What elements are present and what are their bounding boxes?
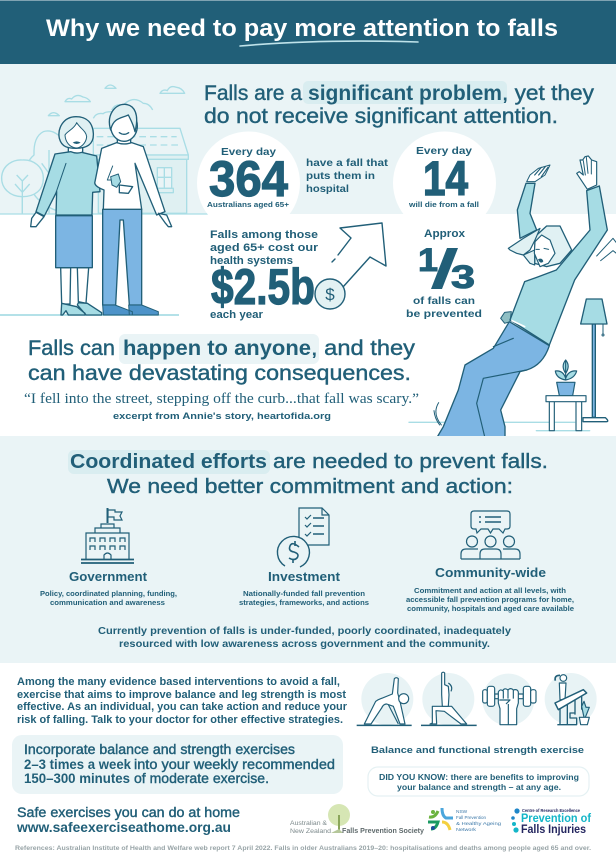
heading: coordinated efforts: are needed to prevent falls. [273, 451, 548, 473]
quote from Annie's story [24, 391, 419, 421]
lamp [581, 299, 608, 422]
logo: NSW Fall Prevention and Healthy Ageing Network: Network [456, 827, 477, 833]
logo: Falls Prevention Society: Falls Prevention Society [342, 826, 425, 835]
stat: 14 every day: Every day [416, 145, 472, 157]
heading: falls are a significant problem: significant problem [308, 82, 502, 105]
man [95, 104, 172, 315]
icon: triangle pose [357, 673, 413, 725]
stat: approx one third preventable: of falls can [413, 295, 475, 307]
heading: falls are a significant problem: , yet they [502, 82, 595, 105]
stat: approx one third preventable: be prevented [406, 308, 482, 320]
investment text: Nationally-funded fall prevention [243, 589, 365, 598]
community-wide text: Community-wide [435, 566, 546, 580]
icon: checklist and coin [277, 508, 329, 567]
logo: NSW Fall Prevention and Healthy Ageing Network [428, 808, 501, 833]
callout: weekly exercise recommendation [12, 735, 343, 794]
callout: weekly exercise recommendation: into your weekly recommended [134, 757, 335, 772]
icons: balance and strength exercises [357, 672, 597, 726]
text: exercise intervention paragraph: effective. As an individual, you can take action and reduce your [17, 701, 348, 713]
callout: did you know: your balance and strength – at any age. [397, 782, 561, 792]
community-wide text [406, 566, 574, 613]
icon: person on stairs with plant [545, 673, 597, 725]
heading: falls are a significant problem [204, 81, 595, 128]
panel: coordinated efforts [0, 436, 616, 663]
heading: falls can happen to anyone: , and they [311, 337, 416, 360]
callout: weekly exercise recommendation: Incorporate balance and strength exercises [24, 742, 295, 757]
references: References: Australian Institute of Health and Welfare web report 7 April 2022. Falls in older Australians 2019–20: hospitalisations and deaths among people aged 65 and over. [15, 845, 591, 852]
callout: weekly exercise recommendation: 2–3 times a week [24, 757, 131, 772]
text: exercise intervention paragraph: risk of falling. Talk to your doctor for other effective strategies. [17, 714, 343, 726]
text: currently under-funded: resourced with low awareness across government and the community. [119, 638, 490, 650]
quote from Annie's story: excerpt from Annie's story, heartofida.org [113, 411, 331, 421]
icon: rising arrow and dollar coin [315, 223, 386, 309]
icon: government building [81, 508, 134, 563]
stat: cost $2.5b [210, 229, 319, 321]
text: safe exercises website: www.safeexerciseathome.org.au [16, 820, 231, 835]
callout: did you know [368, 767, 589, 796]
icon: rising arrow and dollar coin: $ [325, 285, 335, 304]
logo: Prevention of Falls Injuries: Prevention of [521, 813, 591, 825]
stat: cost $2.5b: each year [210, 309, 264, 321]
stat: cost $2.5b: aged 65+ cost our [210, 242, 319, 254]
stat: approx one third preventable: 1 [418, 242, 438, 278]
logo: Falls Prevention Society [290, 804, 425, 835]
heading: falls can happen to anyone: happen to anyone [123, 337, 311, 360]
heading: falls can happen to anyone: Falls can [28, 337, 115, 360]
government text: communication and awareness [50, 598, 165, 607]
logo: NSW Fall Prevention and Healthy Ageing Network: Fall Prevention [456, 815, 486, 821]
government text: Policy, coordinated planning, funding, [40, 589, 177, 598]
quote from Annie's story: “I fell into the street, stepping off the curb...that fall was scary.” [24, 391, 419, 407]
text: exercise intervention paragraph: Among the many evidence based interventions to avoid a fall, [17, 676, 340, 688]
investment text [239, 570, 369, 607]
heading: falls can happen to anyone [28, 334, 416, 385]
community-wide text: accessible fall prevention programs for home, [406, 595, 574, 604]
text: currently under-funded: Currently prevention of falls is under-funded, poorly coordinated, inadequately [98, 625, 511, 637]
text: exercise intervention paragraph: exercise that aims to improve balance and leg strength is most [17, 689, 346, 701]
logo: Falls Prevention Society: Australian & [290, 820, 328, 827]
heading: falls are a significant problem: do not receive significant attention. [204, 105, 558, 128]
header banner [0, 0, 616, 64]
stat: cost $2.5b: health systems [210, 255, 293, 267]
logo: NSW Fall Prevention and Healthy Ageing Network: NSW [456, 809, 468, 815]
callout: weekly exercise recommendation: of moderate exercise. [134, 771, 269, 786]
heading: falls are a significant problem: Falls are a [204, 82, 302, 105]
stat: approx one third preventable [406, 228, 482, 320]
stat: 14 every day: 14 [423, 153, 468, 206]
illustration: house, clouds and trees background [0, 85, 210, 315]
logo: Falls Prevention Society: New Zealand [290, 828, 331, 835]
panel: problem section background [0, 64, 616, 214]
header banner: Why we need to pay more attention to falls [46, 15, 558, 42]
logo: NSW Fall Prevention and Healthy Ageing Network: & Healthy Ageing [456, 821, 501, 827]
woman falling [437, 156, 607, 438]
stat: cost $2.5b: Falls among those [210, 229, 318, 241]
heading: falls can happen to anyone: can have devastating consequences. [28, 362, 411, 385]
callout: did you know: DID YOU KNOW: there are benefits to improving [379, 772, 579, 782]
text: have a fall that puts them in hospital: have a fall that [306, 157, 389, 169]
text: safe exercises website [16, 805, 240, 835]
text: have a fall that puts them in hospital [306, 157, 389, 195]
text: currently under-funded [98, 625, 511, 650]
icon: community group with speech bubble [461, 511, 520, 559]
caption: balance and functional strength exercise: Balance and functional strength exercise [371, 745, 584, 756]
investment text: Investment [268, 570, 341, 584]
heading: coordinated efforts: Coordinated efforts [70, 451, 267, 473]
heading: coordinated efforts [68, 450, 548, 498]
stat: 14 every day: will die from a fall [408, 202, 479, 209]
text: have a fall that puts them in hospital: puts them in [306, 170, 375, 182]
stat: approx one third preventable: 3 [451, 259, 475, 295]
stat: 364 every day: Australians aged 65+ [207, 202, 289, 209]
side table with plant [546, 360, 586, 431]
stat: 14 every day [393, 132, 496, 234]
government text [40, 570, 177, 607]
illustration: older couple [31, 104, 172, 315]
callout: weekly exercise recommendation: 150–300 minutes [24, 771, 130, 786]
community-wide text: community, hospitals and aged care available [407, 604, 574, 613]
stat: 364 every day: 364 [209, 151, 288, 207]
woman [31, 117, 102, 315]
text: safe exercises website: Safe exercises you can do at home [17, 805, 240, 820]
stat: cost $2.5b: $2.5b [211, 259, 315, 315]
stat: 364 every day [197, 132, 300, 234]
text: exercise intervention paragraph [17, 676, 348, 726]
logo: Prevention of Falls Injuries [511, 808, 591, 836]
icon: dumbbell in fist [482, 674, 536, 726]
government text: Government [69, 570, 148, 584]
heading: coordinated efforts: We need better commitment and action: [107, 476, 513, 498]
stat: 364 every day: Every day [221, 146, 276, 158]
text: have a fall that puts them in hospital: hospital [306, 183, 349, 195]
investment text: strategies, frameworks, and actions [239, 598, 369, 607]
illustration: falling woman, lamp and side table [409, 156, 616, 438]
icon: warrior pose [421, 672, 477, 725]
logo: Prevention of Falls Injuries: Centre of Research Excellence [522, 808, 581, 813]
stat: approx one third preventable: Approx [424, 228, 466, 240]
logo: Prevention of Falls Injuries: Falls Injuries [521, 824, 586, 836]
community-wide text: Commitment and action at all levels, with [414, 586, 566, 595]
